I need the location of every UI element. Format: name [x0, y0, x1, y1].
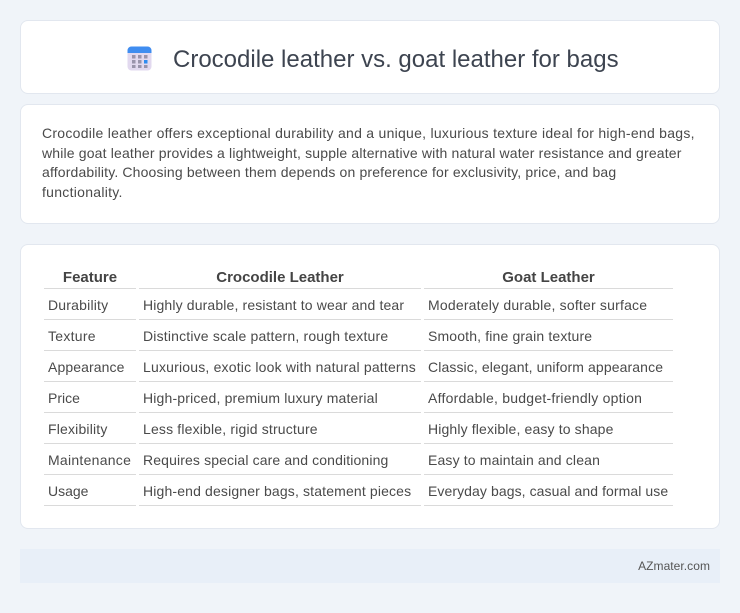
row: texture: Texture	[48, 328, 96, 344]
row: maintenance: Maintenance	[48, 452, 131, 468]
row: durability: Highly durable, resistant to wear and tear	[143, 297, 404, 313]
text: summary paragraph: affordability. Choosing between them depends on preference for exclusivity, price, and bag	[42, 164, 616, 180]
row: maintenance: Requires special care and conditioning	[143, 452, 388, 468]
row: durability: Durability	[48, 297, 108, 313]
title: Crocodile leather vs. goat leather for bags	[173, 46, 619, 73]
row: maintenance: Easy to maintain and clean	[428, 452, 600, 468]
panel: title card	[20, 20, 720, 94]
row: price: Affordable, budget-friendly option	[428, 390, 642, 406]
table header	[63, 269, 595, 286]
row: maintenance	[48, 452, 600, 468]
row: price: Price	[48, 390, 80, 406]
row: usage: Usage	[48, 483, 88, 499]
table header: Crocodile Leather	[216, 269, 344, 286]
footer bar	[20, 549, 720, 583]
row: texture: Distinctive scale pattern, rough texture	[143, 328, 388, 344]
row: appearance	[48, 359, 663, 375]
table header: Feature	[63, 269, 117, 286]
icon: calendar	[128, 46, 152, 70]
text: summary paragraph: Crocodile leather offers exceptional durability and a unique, luxurious texture ideal for high-end bags,	[42, 125, 695, 141]
row: durability	[48, 297, 647, 313]
text: summary paragraph	[42, 125, 695, 200]
row: price: High-priced, premium luxury material	[143, 390, 378, 406]
row: usage: High-end designer bags, statement pieces	[143, 483, 411, 499]
row: price	[48, 390, 642, 406]
panel: summary	[20, 104, 720, 224]
table header: Goat Leather	[502, 269, 595, 286]
row: usage	[48, 483, 668, 499]
row: flexibility: Less flexible, rigid structure	[143, 421, 318, 437]
row: appearance: Appearance	[48, 359, 125, 375]
row: flexibility: Highly flexible, easy to shape	[428, 421, 614, 437]
row: texture	[48, 328, 592, 344]
footer credit: AZmater.com	[638, 559, 710, 573]
panel: comparison table	[20, 244, 720, 529]
text: summary paragraph: functionality.	[42, 184, 123, 200]
row: durability: Moderately durable, softer surface	[428, 297, 647, 313]
text: summary paragraph: while goat leather provides a lightweight, supple alternative with natural water resistance and greater	[42, 144, 682, 160]
row: texture: Smooth, fine grain texture	[428, 328, 592, 344]
row: flexibility	[48, 421, 614, 437]
row: usage: Everyday bags, casual and formal use	[428, 483, 668, 499]
row: appearance: Luxurious, exotic look with natural patterns	[143, 359, 416, 375]
row: flexibility: Flexibility	[48, 421, 108, 437]
row: appearance: Classic, elegant, uniform appearance	[428, 359, 663, 375]
